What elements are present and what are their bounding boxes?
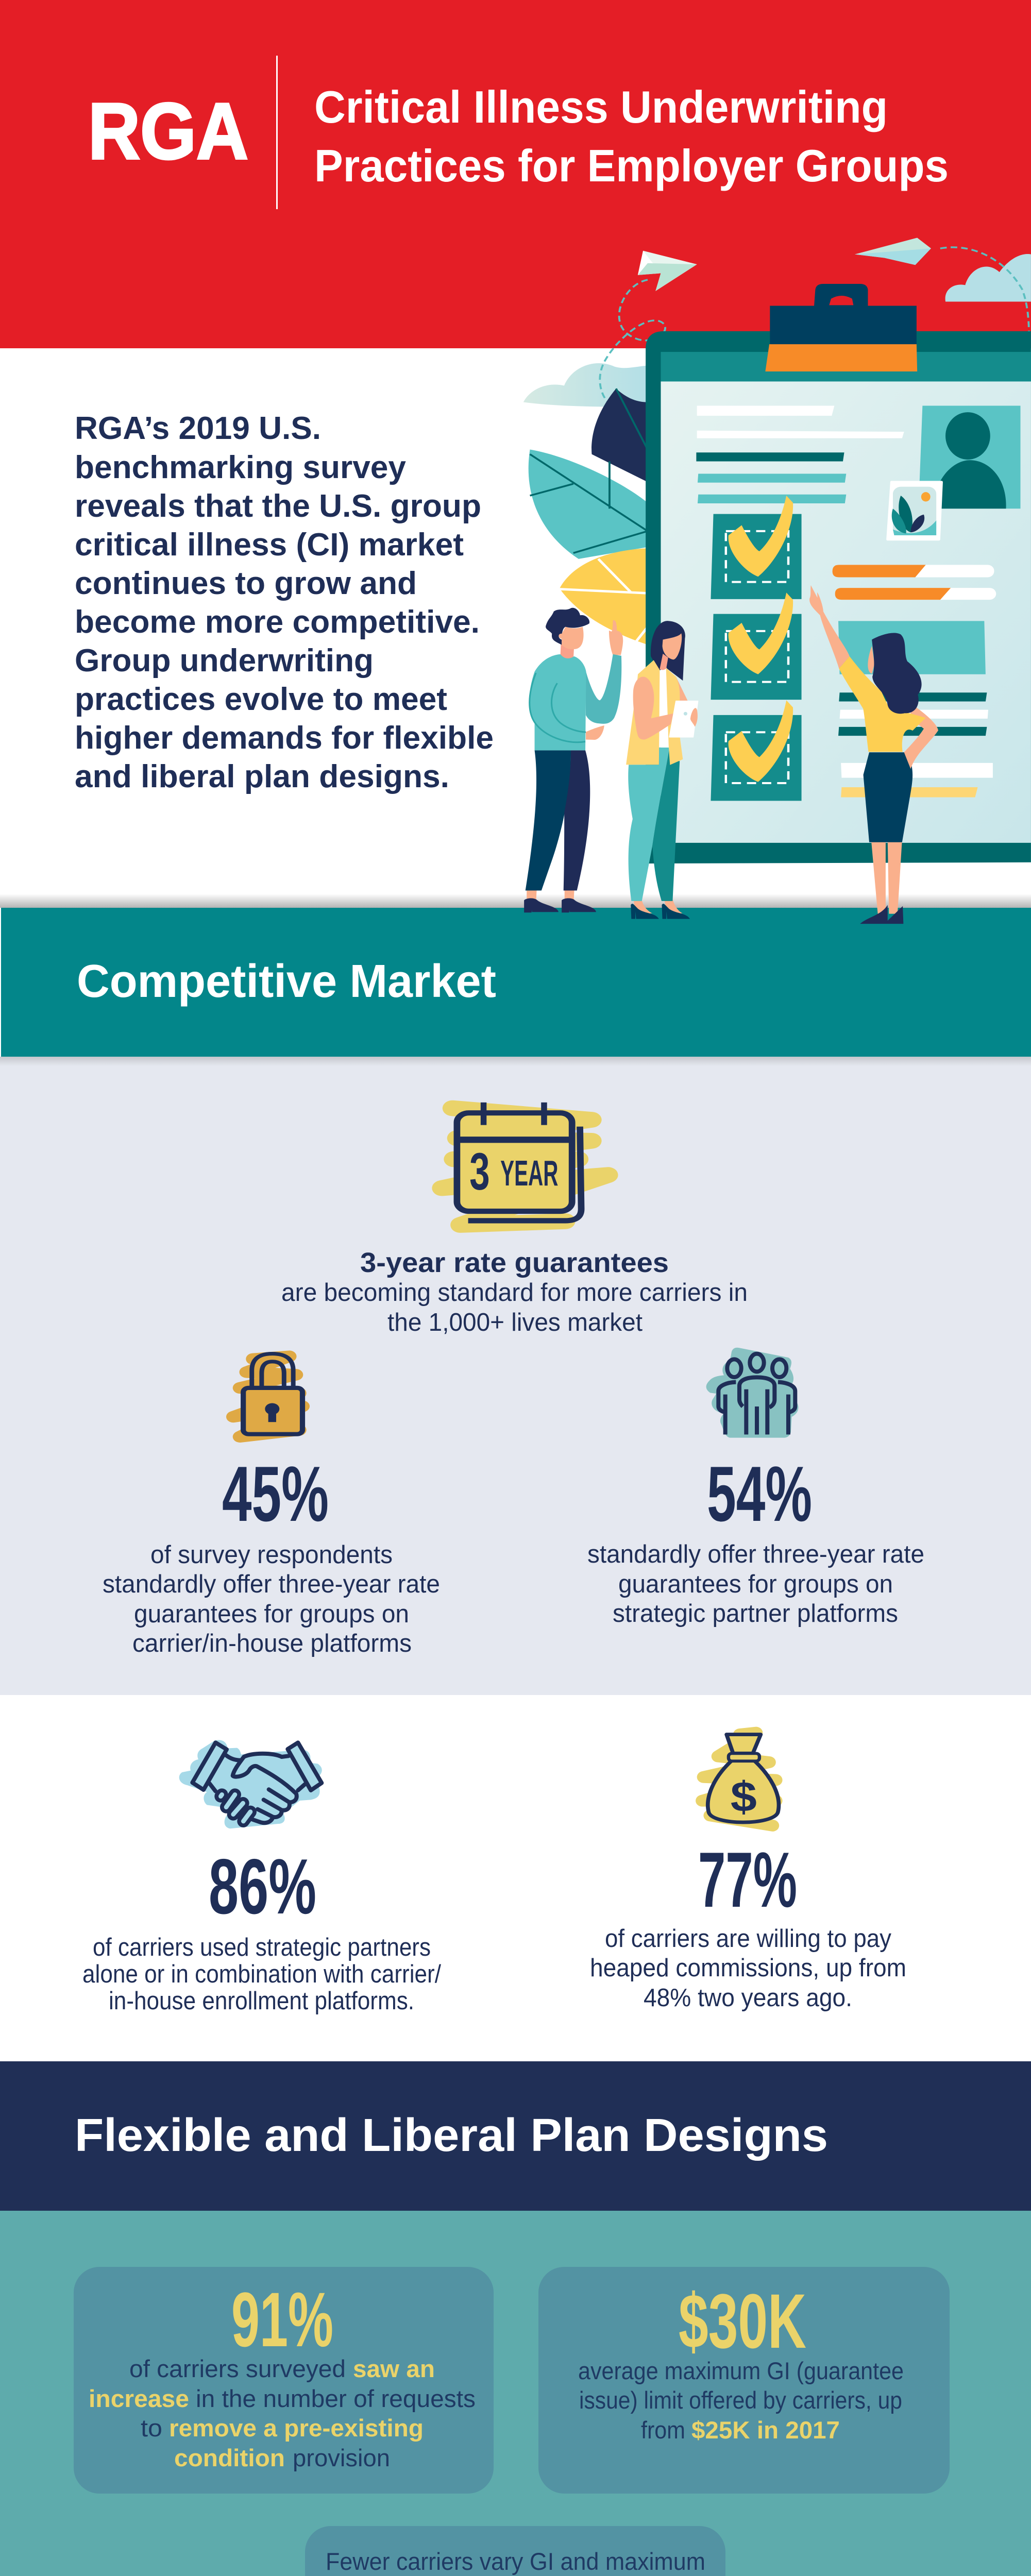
- intro text: critical illness (CI) market: [75, 527, 464, 563]
- card: 91%: condition: [174, 2444, 285, 2471]
- intro text: continues to grow and: [75, 566, 417, 601]
- text: 54% description: guarantees for groups on: [618, 1570, 893, 1598]
- intro text: and liberal plan designs.: [75, 759, 449, 794]
- section panel: Competitive Market content: [0, 1057, 1031, 1695]
- text: 77% description: 48% two years ago.: [644, 1984, 852, 2012]
- clipboard clip: [765, 284, 917, 371]
- text: 54% description: standardly offer three-year rate: [587, 1540, 924, 1568]
- intro text: reveals that the U.S. group: [75, 488, 481, 524]
- card: 91%: provision: [293, 2444, 390, 2471]
- text: 45% description: of survey respondents: [150, 1541, 393, 1569]
- intro text: [75, 411, 494, 794]
- card: 9%: Fewer carriers vary GI and maximum: [326, 2548, 705, 2575]
- intro text: benchmarking survey: [75, 450, 407, 485]
- card: 91%: increase: [89, 2385, 189, 2412]
- card: 91%: of carriers surveyed: [129, 2355, 346, 2382]
- title: Critical Illness Underwriting: [314, 81, 888, 132]
- stat: 45%: 45%: [222, 1450, 329, 1538]
- man in teal sweater: [524, 608, 623, 912]
- intro text: Group underwriting: [75, 643, 374, 679]
- icon: 3 year calendar: YEAR: [500, 1153, 558, 1193]
- card: $30K: $25K in 2017: [691, 2416, 840, 2444]
- intro text: RGA’s 2019 U.S.: [75, 411, 321, 446]
- intro text: practices evolve to meet: [75, 682, 447, 717]
- card: $30K: average maximum GI (guarantee: [578, 2357, 904, 2384]
- form lines: [696, 406, 904, 503]
- section band: Competitive Market: [1, 908, 1031, 1057]
- profile photo: [919, 406, 1021, 509]
- progress bars: [833, 565, 996, 600]
- illustration: clipboard and team: [523, 238, 1031, 924]
- card: $30K: [538, 2267, 950, 2494]
- card: $30K: issue) limit offered by carriers, up: [579, 2386, 902, 2414]
- icon: padlock: [233, 1354, 302, 1437]
- text: 86% description: alone or in combination with carrier/: [82, 1960, 441, 1988]
- text: 86% description: [82, 1934, 441, 2015]
- icon: 3 year calendar: 3: [469, 1142, 490, 1201]
- intro text: higher demands for flexible: [75, 720, 494, 756]
- form blocks: [838, 621, 993, 798]
- woman with tablet: [626, 621, 698, 919]
- icon: paper planes and clouds: [523, 238, 1031, 407]
- section band: Flexible and Liberal Plan Designs: [0, 2061, 1031, 2211]
- intro text: become more competitive.: [75, 604, 480, 640]
- 3-year rate guarantees text: are becoming standard for more carriers in: [281, 1279, 748, 1307]
- icon: 3 year calendar: [442, 1103, 608, 1225]
- clipboard board: [646, 331, 1031, 863]
- card: 91%: 91%: [231, 2276, 333, 2363]
- icon: money bag: $: [731, 1773, 757, 1821]
- text: 54% description: [587, 1540, 924, 1628]
- text: 86% description: of carriers used strategic partners: [93, 1934, 431, 1961]
- checkboxes: [711, 496, 802, 801]
- text: 45% description: carrier/in-house platforms: [132, 1630, 412, 1657]
- section band: Flexible and Liberal Plan Designs: Flexible and Liberal Plan Designs: [75, 2110, 828, 2161]
- text: 77% description: of carriers are willing to pay: [605, 1925, 891, 1953]
- text: 45% description: guarantees for groups on: [134, 1600, 409, 1628]
- card: 91%: in the number of requests: [196, 2385, 476, 2412]
- stat: 77%: 77%: [698, 1836, 797, 1924]
- icon: handshake: [179, 1740, 322, 1828]
- title: [276, 56, 949, 209]
- text: 45% description: standardly offer three-year rate: [103, 1570, 440, 1598]
- card: 91%: to: [141, 2414, 162, 2442]
- header band: [0, 0, 1031, 348]
- 3-year rate guarantees text: the 1,000+ lives market: [387, 1309, 643, 1336]
- text: 54% description: strategic partner platforms: [613, 1600, 898, 1628]
- title: Practices for Employer Groups: [314, 140, 949, 191]
- section band: Competitive Market: Competitive Market: [77, 956, 496, 1007]
- 3-year rate guarantees text: 3-year rate guarantees: [360, 1247, 669, 1278]
- woman pointing at board: [809, 585, 938, 924]
- stat: 54%: 54%: [707, 1450, 812, 1538]
- text: 45% description: [103, 1541, 440, 1657]
- card: 91%: saw an: [353, 2355, 435, 2382]
- stat: 86%: 86%: [209, 1843, 316, 1930]
- RGA logo: RGA: [88, 87, 248, 176]
- icon: money bag: [702, 1733, 779, 1825]
- small picture card: [888, 482, 941, 539]
- card: $30K: from: [641, 2416, 685, 2444]
- card: 9%: [305, 2526, 725, 2576]
- leaves behind clipboard: [529, 388, 648, 645]
- band shadow: [0, 894, 1031, 908]
- panel: partners and commissions: [0, 1695, 1031, 2061]
- panel: plan design stats: [0, 2211, 1031, 2576]
- card: 91%: remove a pre-existing: [169, 2414, 424, 2442]
- card: 91%: [74, 2267, 494, 2494]
- text: 86% description: in-house enrollment platforms.: [109, 1987, 414, 2015]
- text: 77% description: heaped commissions, up from: [590, 1954, 906, 1982]
- text: 77% description: [590, 1925, 906, 2012]
- card: $30K: $30K: [679, 2278, 806, 2364]
- icon: group of people: [706, 1348, 799, 1438]
- 3-year rate guarantees text: [281, 1247, 748, 1336]
